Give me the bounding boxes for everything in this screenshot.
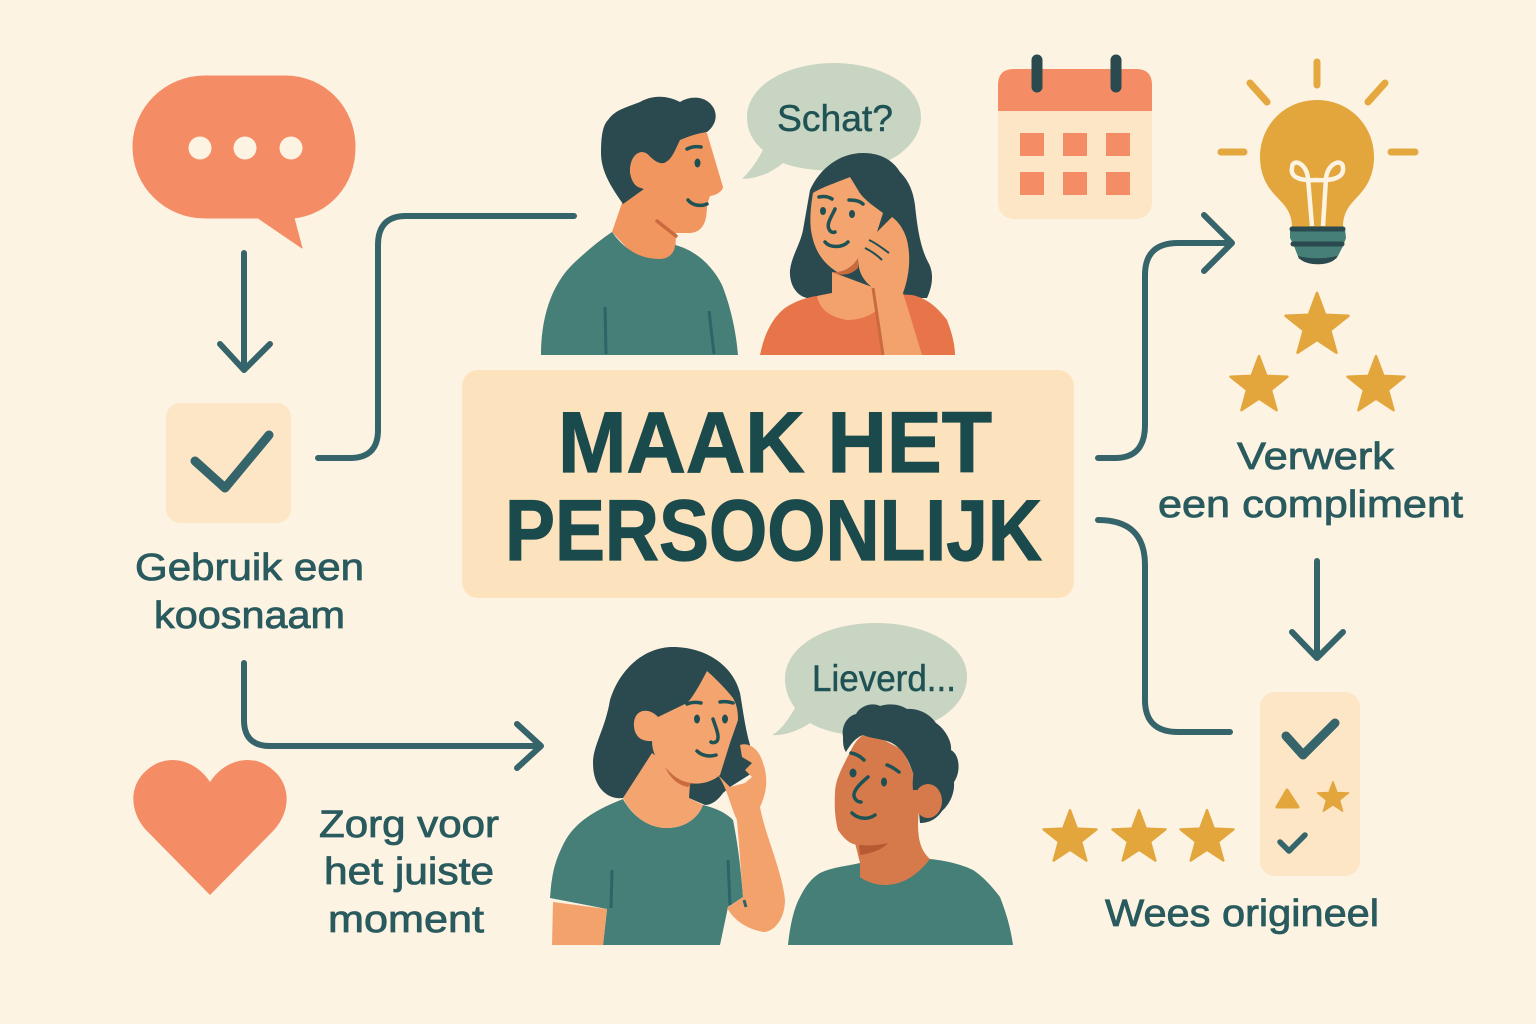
label: zorg voor het juiste moment: moment	[328, 899, 484, 941]
speech bubble: schat: Schat?	[777, 98, 893, 139]
panel: title: PERSOONLIJK	[505, 483, 1042, 579]
person: woman top	[760, 153, 955, 355]
panel: title: MAAK HET	[558, 395, 992, 491]
label: wees origineel: Wees origineel	[1105, 893, 1379, 935]
icon: light bulb	[1221, 62, 1415, 264]
label: verwerk een compliment: Verwerk	[1237, 436, 1395, 478]
arrow: title to bulb	[1098, 215, 1232, 458]
label: zorg voor het juiste moment: het juiste	[324, 851, 494, 893]
icon: checklist panel	[1260, 692, 1360, 876]
arrow: chat to check	[220, 253, 270, 370]
arrow: koosnaam to couple bottom	[244, 663, 541, 768]
person: man top	[541, 97, 738, 355]
label: zorg voor het juiste moment	[319, 804, 499, 941]
icon: calendar	[998, 60, 1152, 219]
arrow: compliment to checklist	[1292, 561, 1343, 658]
icon: chat bubble	[133, 76, 355, 248]
label: gebruik een koosnaam: koosnaam	[154, 595, 345, 637]
icon: heart	[133, 760, 287, 895]
speech bubble: lieverd: Lieverd...	[812, 658, 956, 699]
arrow: title to checklist	[1098, 520, 1230, 732]
arrow: check to couple top	[318, 216, 574, 458]
label: verwerk een compliment: een compliment	[1158, 484, 1463, 526]
label: gebruik een koosnaam: Gebruik een	[135, 547, 364, 589]
panel: title	[462, 370, 1074, 598]
icon: row of stars	[1043, 810, 1234, 861]
label: zorg voor het juiste moment: Zorg voor	[319, 804, 499, 846]
speech bubble: lieverd	[772, 623, 967, 735]
speech bubble: schat	[742, 63, 921, 179]
person: man bottom	[788, 704, 1013, 945]
label: verwerk een compliment	[1158, 436, 1463, 526]
label: gebruik een koosnaam	[135, 547, 364, 637]
person: woman bottom	[550, 647, 785, 945]
icon: three stars	[1230, 293, 1405, 410]
icon: check box	[166, 403, 291, 523]
